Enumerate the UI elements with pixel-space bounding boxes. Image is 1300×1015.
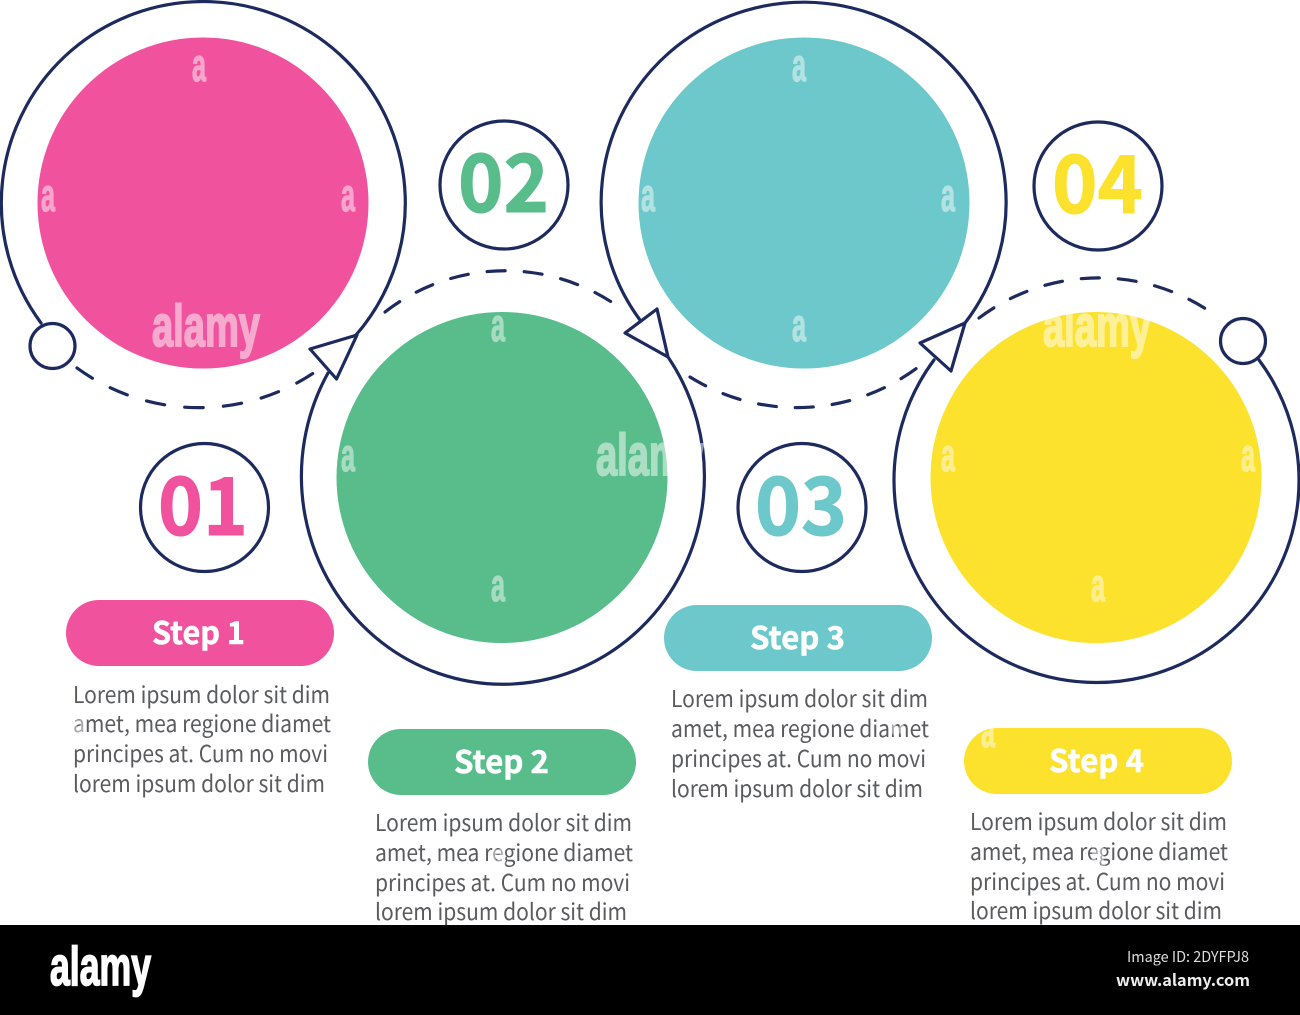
text block: step 2: lorem ipsum dolor sit dim — [375, 893, 627, 927]
number badge 01: 01 — [158, 443, 248, 559]
watermark: small marks on circles: a — [792, 299, 806, 351]
number badge 03: 03 — [755, 443, 847, 559]
text block: step 4: principes at. Cum no movi — [970, 863, 1225, 897]
watermark: small marks on circles: a — [941, 169, 955, 221]
text block: step 1: amet, mea regione diamet — [73, 705, 331, 739]
text block: step 3: principes at. Cum no movi — [671, 740, 926, 774]
number badge 02: 02 — [458, 120, 549, 236]
pill: step 3 — [664, 605, 932, 671]
footer logo: alamy — [50, 935, 151, 997]
text block: step 4 — [970, 803, 1228, 926]
text block: step 2 — [375, 804, 633, 927]
footer bar — [0, 925, 1300, 1015]
watermark: small marks on circles: a — [41, 169, 55, 221]
ring: step 1 solid and dashed — [1, 2, 405, 408]
watermark: small marks on circles: a — [891, 693, 905, 745]
pill: step 4 — [964, 728, 1232, 794]
watermark: stock mark on green circle: alamy — [596, 423, 704, 488]
circle: step 2 green — [336, 312, 668, 643]
number badge 04 — [1034, 121, 1162, 250]
arrowhead: step 2 to 3 — [625, 309, 668, 357]
text block: step 4: amet, mea regione diamet — [970, 833, 1228, 867]
watermark: small marks on circles: a — [1091, 559, 1105, 611]
text block: step 4: lorem ipsum dolor sit dim — [970, 892, 1222, 926]
watermark: small marks on circles: a — [72, 693, 86, 745]
text block: step 2: Lorem ipsum dolor sit dim — [375, 804, 632, 838]
watermark: small marks on circles: a — [641, 169, 655, 221]
text block: step 2: principes at. Cum no movi — [375, 864, 630, 898]
text block: step 4: Lorem ipsum dolor sit dim — [970, 803, 1227, 837]
pill: step 1 — [66, 600, 334, 666]
watermark: small marks on circles: a — [1241, 429, 1255, 481]
text block: step 1: Lorem ipsum dolor sit dim — [73, 676, 330, 710]
text block: step 1: lorem ipsum dolor sit dim — [73, 765, 325, 799]
pill: step 2 — [368, 729, 636, 795]
node: step 1 start — [30, 324, 75, 368]
arrowhead: step 3 to 4 — [920, 323, 965, 371]
watermark: small marks on circles: a — [792, 39, 806, 91]
watermark: small marks on circles: a — [981, 705, 995, 757]
pill: step 2: Step 2 — [454, 737, 549, 782]
watermark: small marks on circles: a — [491, 299, 505, 351]
watermark: small marks on circles: a — [341, 169, 355, 221]
watermark: small marks on circles: a — [341, 429, 355, 481]
circle: step 3 teal — [638, 38, 970, 368]
text block: step 1 — [73, 676, 331, 799]
watermark: stock mark on pink circle: alamy — [152, 294, 260, 359]
number badge 01 — [140, 443, 268, 572]
arrowhead: step 1 to 2 — [310, 335, 357, 379]
watermark: small marks on circles: a — [1091, 823, 1105, 875]
watermark: small marks on circles: a — [491, 559, 505, 611]
text block: step 2: amet, mea regione diamet — [375, 834, 633, 868]
ring: step 2 solid and dashed — [301, 271, 704, 684]
number badge 03 — [738, 443, 866, 572]
watermark: small marks on circles: a — [941, 429, 955, 481]
number badge 02 — [440, 120, 568, 249]
number badge 04: 04 — [1052, 121, 1143, 237]
text block: step 1: principes at. Cum no movi — [73, 735, 328, 769]
text block: step 3: amet, mea regione diamet — [671, 710, 929, 744]
node: step 4 end — [1220, 318, 1266, 364]
watermark: small marks on circles: a — [491, 823, 505, 875]
text block: step 3: Lorem ipsum dolor sit dim — [671, 680, 928, 714]
ring: step 4 solid and dashed — [894, 278, 1299, 683]
text block: step 3 — [671, 680, 929, 804]
pill: step 4: Step 4 — [1049, 736, 1144, 781]
footer site address: www.alamy.com — [1116, 967, 1250, 991]
text block: step 3: lorem ipsum dolor sit dim — [671, 770, 923, 804]
circle: step 1 pink — [38, 38, 368, 368]
watermark: stock mark on yellow circle: alamy — [1043, 294, 1151, 359]
footer image id: Image ID: 2DYFPJ8 — [1127, 946, 1249, 967]
circle: step 4 yellow — [930, 312, 1262, 643]
ring: step 3 solid and dashed — [601, 2, 1006, 408]
pill: step 3: Step 3 — [750, 613, 845, 658]
watermark: small marks on circles — [41, 39, 1255, 875]
watermark: small marks on circles: a — [192, 39, 206, 91]
pill: step 1: Step 1 — [152, 608, 245, 653]
